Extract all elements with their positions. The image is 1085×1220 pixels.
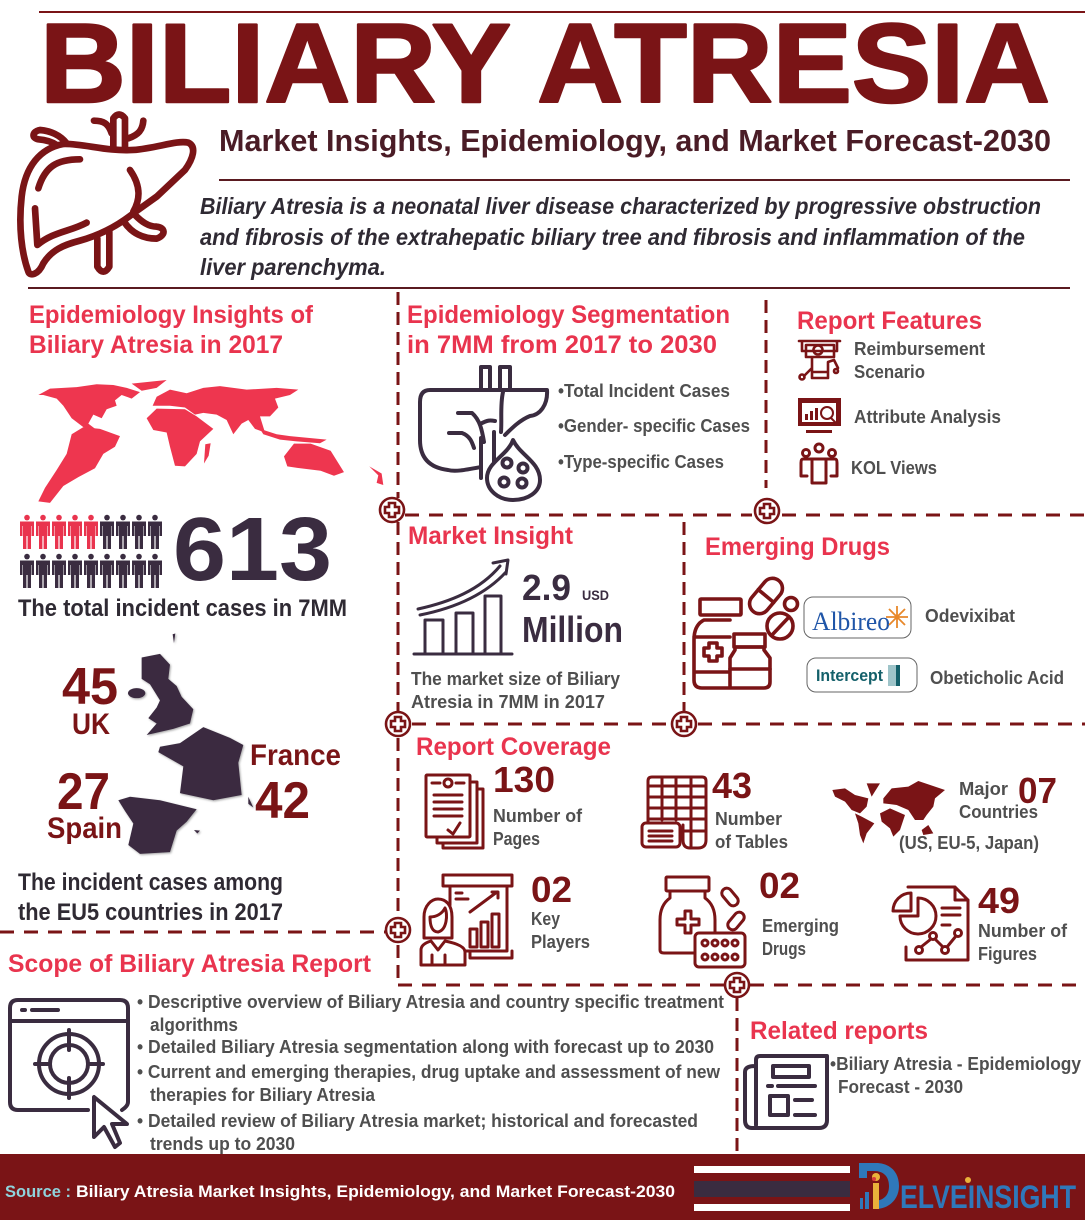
icon: browser target cursor: [10, 1000, 128, 1147]
stat: major countries: Major: [959, 779, 1008, 799]
icon: attribute analysis: [798, 398, 841, 433]
stat: figures: Figures: [978, 944, 1037, 964]
footer band: [0, 1154, 1085, 1220]
heading: epidemiology insights: Biliary Atresia in 2017: [29, 331, 283, 359]
map: UK France Spain: [118, 634, 253, 854]
list: scope bullets: therapies for Biliary Atresia: [150, 1085, 376, 1105]
icon: key players: [421, 875, 512, 965]
list: scope bullets: • Descriptive overview of Biliary Atresia and country specific treatment: [137, 992, 724, 1012]
footer stripes: [694, 1166, 850, 1211]
caption: EU5 incident cases: The incident cases among: [18, 869, 283, 896]
stat: emerging drugs count: 02: [759, 865, 800, 906]
logo: Intercept: [807, 658, 917, 692]
logo: Albireo: [804, 597, 911, 638]
stat: emerging drugs count: Emerging: [762, 916, 839, 936]
text: related report: [830, 1054, 1081, 1097]
stat: market size: USD: [582, 587, 609, 603]
title: BILIARY ATRESIA: [40, 1, 1050, 126]
stat: key players: 02: [531, 869, 572, 910]
caption: market size: [411, 669, 620, 712]
stat: major countries: [899, 770, 1057, 853]
stat: figures: 49: [978, 880, 1020, 921]
heading: report features: Report Features: [797, 307, 982, 335]
stat: market size: [522, 567, 623, 650]
connector: plus badges: [380, 498, 779, 997]
stat: France 42: 42: [255, 772, 310, 830]
panel: related reports: [745, 1017, 1081, 1128]
heading: report coverage: Report Coverage: [416, 733, 611, 761]
icon: newspaper: [745, 1056, 827, 1128]
heading: emerging drugs: Emerging Drugs: [705, 533, 890, 561]
logo: Intercept: Intercept: [816, 666, 883, 685]
stat: pages: Number of: [493, 806, 583, 826]
stat: tables: Number: [715, 809, 782, 829]
stat: major countries: 07: [1018, 770, 1057, 811]
heading: scope: Scope of Biliary Atresia Report: [8, 950, 372, 978]
stat: key players: Players: [531, 932, 590, 952]
list: scope bullets: algorithms: [150, 1015, 238, 1035]
list: scope bullets: • Detailed review of Biliary Atresia market; historical and forecasted: [137, 1111, 698, 1131]
caption: EU5 incident cases: the EU5 countries in 2017: [18, 899, 283, 926]
stat: pages: 130: [493, 759, 555, 800]
icon: pages: [426, 775, 483, 848]
text: related report: Forecast - 2030: [838, 1077, 963, 1097]
stat: France 42: France: [250, 739, 341, 772]
icon: reimbursement: [799, 341, 840, 380]
list: scope bullets: • Current and emerging therapies, drug uptake and assessment of new: [137, 1062, 721, 1082]
subtitle: Market Insights, Epidemiology, and Market Forecast-2030: [219, 123, 1051, 158]
heading: epidemiology insights: [29, 301, 314, 359]
world map: [38, 380, 383, 503]
caption: market size: Atresia in 7MM in 2017: [411, 692, 605, 712]
intro paragraph: [200, 193, 1041, 280]
panel: epidemiology segmentation: [407, 301, 750, 500]
text: related report: •Biliary Atresia - Epidemiology: [830, 1054, 1081, 1074]
icon: figures: [893, 887, 968, 960]
intro paragraph: liver parenchyma.: [200, 254, 386, 280]
stat: emerging drugs count: Drugs: [762, 939, 806, 959]
icon: emerging drugs medicine: [660, 877, 746, 967]
stat: France 42: [250, 739, 341, 830]
stat: UK 45: 45: [62, 658, 118, 716]
panel: market insight: [408, 522, 623, 712]
stat: major countries: Countries: [959, 802, 1038, 822]
text: attribute analysis: Attribute Analysis: [854, 407, 1001, 427]
heading: epidemiology insights: Epidemiology Insights of: [29, 301, 314, 329]
stat: key players: Key: [531, 909, 560, 929]
list: scope bullets: • Detailed Biliary Atresia segmentation along with forecast up to 2030: [137, 1037, 714, 1057]
icon: liver: [20, 114, 193, 274]
panel: epidemiology insights: [18, 301, 383, 926]
list: segmentation: [558, 381, 750, 472]
text: Odevixibat: Odevixibat: [925, 606, 1015, 626]
stat: figures: Number of: [978, 921, 1068, 941]
text: reimbursement: Scenario: [854, 362, 925, 382]
source line: Biliary Atresia Market Insights, Epidemiology, and Market Forecast-2030: [76, 1182, 675, 1201]
logo: Albireo: Albireo: [812, 607, 890, 636]
list: scope bullets: trends up to 2030: [150, 1134, 295, 1154]
stat: pages: [493, 759, 583, 849]
stat: Spain 27: Spain: [47, 812, 122, 845]
list: segmentation: •Gender- specific Cases: [558, 416, 750, 436]
panel: emerging drugs: [694, 533, 1064, 692]
heading: market insight: Market Insight: [408, 522, 574, 550]
stat: market size: 2.9: [522, 567, 571, 608]
stat: UK 45: UK: [72, 708, 110, 741]
icon: tables: [642, 777, 706, 848]
list: segmentation: •Total Incident Cases: [558, 381, 730, 401]
intro paragraph: and fibrosis of the extrahepatic biliary tree and fibrosis and inflammation of the: [200, 224, 1025, 250]
caption: total incident cases: The total incident cases in 7MM: [18, 595, 347, 622]
stat: 613: 613: [173, 500, 332, 600]
icon: world map small: [832, 781, 945, 843]
heading: segmentation: [407, 301, 730, 359]
logo: DelveInsight: [859, 1163, 1076, 1215]
stat: tables: 43: [712, 765, 752, 806]
caption: EU5 incident cases: [18, 869, 283, 926]
icon: medicine bottles: [694, 574, 798, 688]
stat: tables: [712, 765, 788, 852]
panel: scope of report: [8, 950, 724, 1154]
icon: liver with gallbladder: [420, 367, 547, 500]
caption: market size: The market size of Biliary: [411, 669, 620, 689]
icon: KOL people: [801, 444, 837, 483]
panel: report coverage: [416, 733, 1068, 967]
icon: growth chart: [414, 560, 512, 654]
stat: emerging drugs count: [759, 865, 839, 959]
stat: key players: [531, 869, 590, 952]
text: Obeticholic Acid: Obeticholic Acid: [930, 668, 1064, 688]
people pictogram: [20, 515, 162, 588]
intro paragraph: Biliary Atresia is a neonatal liver disease characterized by progressive obstruction: [200, 193, 1041, 219]
heading: related reports: Related reports: [750, 1017, 928, 1045]
stat: UK 45: [62, 658, 118, 741]
heading: segmentation: in 7MM from 2017 to 2030: [407, 331, 717, 359]
source line: Source :: [5, 1182, 71, 1201]
text: reimbursement: [854, 339, 985, 382]
heading: segmentation: Epidemiology Segmentation: [407, 301, 730, 329]
stat: Spain 27: [47, 763, 122, 845]
text: KOL views: KOL Views: [851, 458, 937, 478]
panel: report features: [797, 307, 1001, 483]
stat: pages: Pages: [493, 829, 540, 849]
stat: Spain 27: 27: [57, 763, 110, 821]
list: segmentation: •Type-specific Cases: [558, 452, 724, 472]
stat: market size: Million: [522, 609, 623, 650]
list: scope bullets: [137, 992, 724, 1154]
stat: major countries: (US, EU-5, Japan): [899, 833, 1039, 853]
text: reimbursement: Reimbursement: [854, 339, 985, 359]
stat: tables: of Tables: [715, 832, 788, 852]
stat: figures: [978, 880, 1068, 964]
